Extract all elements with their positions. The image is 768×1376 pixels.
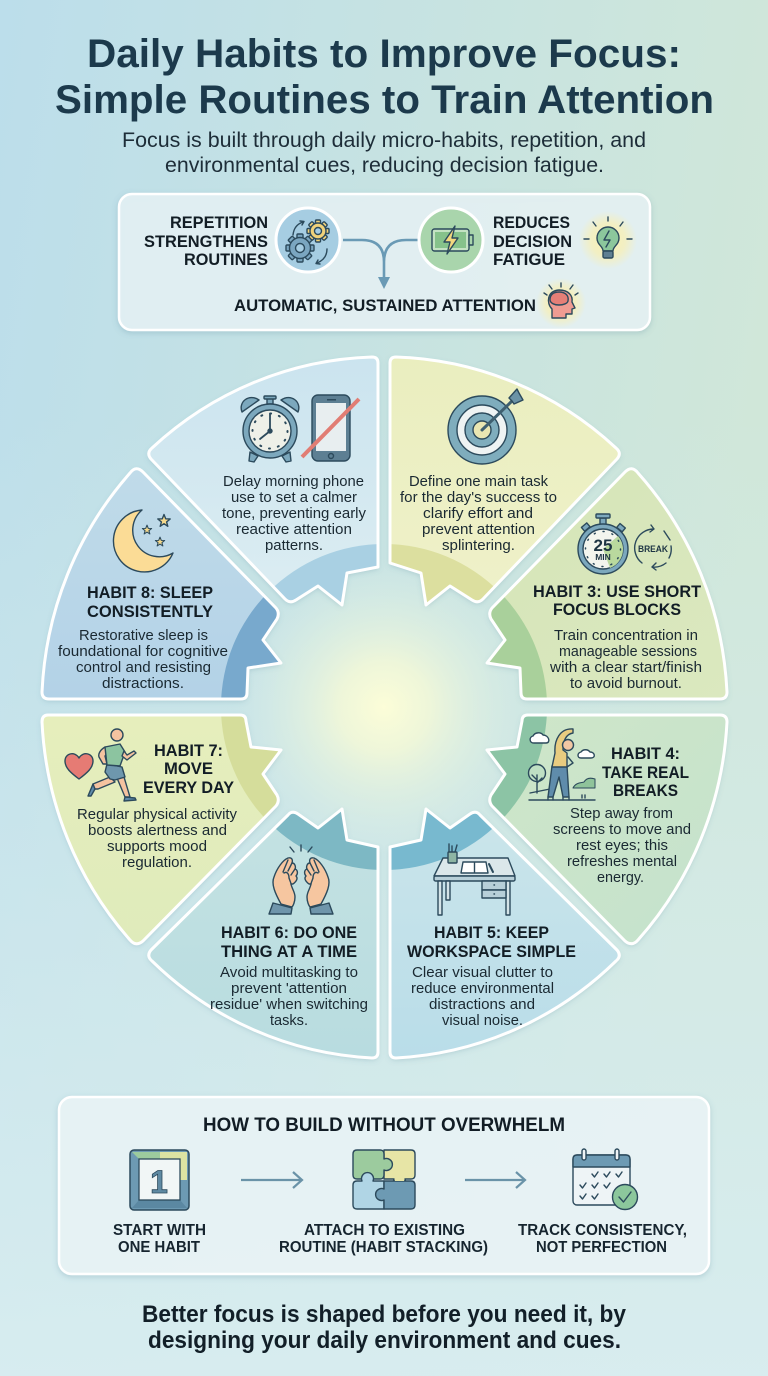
text: habit 6 description: residue' when switching	[210, 997, 368, 1013]
icon: break cycle	[635, 525, 671, 570]
panel: habit 3 focus blocks	[486, 467, 729, 703]
heading: habit 3: FOCUS BLOCKS	[553, 601, 681, 619]
text: habit 6 description: prevent 'attention	[231, 981, 347, 997]
title: Daily Habits to Improve Focus:	[87, 32, 681, 76]
icon: hands	[269, 845, 333, 914]
text: habit 4 description: Step away from	[570, 806, 673, 822]
icon: heart	[65, 754, 93, 779]
heading: habit 5: WORKSPACE SIMPLE	[407, 943, 576, 961]
icon: gears	[276, 208, 340, 272]
label: attach to existing routine: ROUTINE (HABIT STACKING)	[279, 1239, 488, 1256]
closing statement: designing your daily environment and cues.	[148, 1327, 621, 1354]
icon: stopwatch 25 minutes	[578, 514, 628, 574]
text: habit 2 description: Define one main task	[409, 474, 549, 490]
text: habit 1 description: reactive attention	[236, 522, 352, 538]
heading: habit 7: MOVE	[164, 760, 213, 778]
text: habit 2 description: clarify effort and	[423, 506, 533, 522]
heading: habit 7: HABIT 7:	[154, 742, 223, 760]
icon: alarm clock	[241, 396, 299, 462]
heading: habit 8: HABIT 8: SLEEP	[87, 584, 213, 602]
label: track consistency: TRACK CONSISTENCY,	[518, 1222, 687, 1239]
label: attach to existing routine: ATTACH TO EXISTING	[304, 1222, 465, 1239]
label: reduces decision fatigue: REDUCES	[493, 214, 570, 232]
text: habit 5 description: Clear visual clutter to	[412, 965, 553, 981]
panel: how to build without overwhelm	[59, 1097, 709, 1274]
text: habit 3 description	[549, 628, 702, 692]
icon: puzzle	[353, 1150, 415, 1209]
label: start with one habit	[113, 1222, 206, 1256]
icon: stopwatch 25 minutes: 25	[594, 536, 612, 555]
heading: habit 4	[602, 745, 689, 800]
title	[55, 32, 714, 122]
text: habit 4 description: energy.	[597, 870, 644, 886]
heading: habit 4: TAKE REAL	[602, 764, 689, 782]
icon: target with arrow	[448, 389, 523, 464]
subtitle: environmental cues, reducing decision fatigue.	[165, 154, 604, 177]
panel: how habits work	[119, 194, 650, 330]
panel: habit 7 move	[40, 714, 282, 948]
text: habit 7 description	[77, 807, 238, 871]
heading: habit 5	[407, 924, 576, 961]
icon: number one block: 1	[150, 1164, 168, 1200]
heading: habit 8	[87, 584, 213, 621]
heading: habit 7	[143, 742, 234, 797]
icon: break cycle: BREAK	[638, 544, 668, 554]
label: repetition strengthens routines: ROUTINES	[184, 251, 268, 269]
label: start with one habit: START WITH	[113, 1222, 206, 1239]
label: reduces decision fatigue	[493, 214, 572, 269]
text: habit 7 description: Regular physical activity	[77, 807, 238, 823]
label: repetition strengthens routines: REPETITION	[170, 214, 268, 232]
label: repetition strengthens routines	[144, 214, 268, 269]
title: Simple Routines to Train Attention	[55, 78, 714, 122]
closing statement	[142, 1301, 626, 1354]
label: track consistency: NOT PERFECTION	[536, 1239, 667, 1256]
heading: habit 7: EVERY DAY	[143, 779, 234, 797]
text: habit 6 description	[210, 965, 368, 1029]
panel: habit 1 phone delay	[147, 356, 380, 606]
heading: how to build: HOW TO BUILD WITHOUT OVERWHELM	[203, 1114, 565, 1136]
icon: stopwatch 25 minutes: MIN	[595, 552, 611, 562]
text: habit 4 description	[553, 806, 691, 886]
heading: habit 8: CONSISTENTLY	[87, 603, 213, 621]
heading: habit 6: HABIT 6: DO ONE	[221, 924, 357, 942]
heading: habit 3: HABIT 3: USE SHORT	[533, 583, 701, 601]
heading: habit 4: BREAKS	[613, 782, 678, 800]
icon: battery	[419, 208, 483, 272]
text: habit 2 description	[400, 474, 557, 554]
icon: person stretching outdoors	[528, 729, 595, 800]
text: habit 8 description: control and resisting	[76, 660, 211, 676]
text: habit 5 description: reduce environmental	[411, 981, 554, 997]
text: habit 2 description: prevent attention	[422, 522, 535, 538]
icon: moon and stars	[113, 510, 173, 572]
text: habit 1 description: patterns.	[265, 538, 323, 554]
text: habit 8 description: foundational for cognitive	[58, 644, 228, 660]
text: habit 6 description: tasks.	[270, 1013, 308, 1029]
icon: checklist calendar	[573, 1149, 638, 1210]
text: habit 3 description: to avoid burnout.	[570, 676, 682, 692]
icon: brain head	[536, 278, 586, 328]
heading: habit 3	[533, 583, 701, 619]
subtitle	[122, 129, 646, 177]
text: habit 3 description: Train concentration in	[554, 628, 698, 644]
heading: habit 5: HABIT 5: KEEP	[434, 924, 549, 942]
label: attach to existing routine	[279, 1222, 488, 1256]
icon: phone crossed out	[302, 395, 359, 461]
subtitle: Focus is built through daily micro-habits, repetition, and	[122, 129, 646, 152]
panel: habit 5 workspace	[388, 808, 621, 1062]
heading: habit 6	[221, 924, 357, 961]
text: habit 7 description: regulation.	[122, 855, 192, 871]
text: habit 8 description	[58, 628, 228, 692]
icon: light bulb	[579, 211, 637, 269]
text: habit 1 description: tone, preventing early	[222, 506, 367, 522]
arrow: step 1 to 2	[241, 1172, 302, 1188]
text: habit 5 description: distractions and	[429, 997, 535, 1013]
text: habit 6 description: Avoid multitasking to	[220, 965, 358, 981]
icon: runner	[88, 729, 136, 801]
label: reduces decision fatigue: DECISION	[493, 233, 572, 251]
panel: habit 6 one thing	[147, 808, 380, 1062]
icon: number one block	[130, 1150, 189, 1210]
text: habit 8 description: Restorative sleep is	[79, 628, 208, 644]
text: habit 3 description: manageable sessions	[559, 644, 697, 660]
text: habit 3 description: with a clear start/finish	[549, 660, 702, 676]
text: habit 7 description: supports mood	[107, 839, 207, 855]
panel: habit 2 main task	[388, 356, 621, 606]
panel: habit 4 real breaks	[486, 714, 729, 948]
text: habit 8 description: distractions.	[102, 676, 184, 692]
text: habit 2 description: for the day's success to	[400, 490, 557, 506]
closing statement: Better focus is shaped before you need it, by	[142, 1301, 626, 1328]
text: habit 1 description	[222, 474, 367, 554]
label: reduces decision fatigue: FATIGUE	[493, 251, 565, 269]
text: habit 4 description: screens to move and	[553, 822, 691, 838]
text: habit 1 description: use to set a calmer	[231, 490, 357, 506]
text: habit 4 description: refreshes mental	[567, 854, 677, 870]
text: habit 5 description	[411, 965, 554, 1029]
text: habit 4 description: rest eyes; this	[576, 838, 668, 854]
icon: desk	[434, 844, 515, 915]
heading: habit 4: HABIT 4:	[611, 745, 680, 763]
label: automatic sustained attention: AUTOMATIC, SUSTAINED ATTENTION	[234, 297, 536, 315]
arrow: step 2 to 3	[465, 1172, 525, 1188]
label: repetition strengthens routines: STRENGTHENS	[144, 233, 268, 251]
connector arrow	[343, 240, 419, 289]
label: track consistency	[518, 1222, 687, 1256]
text: habit 2 description: splintering.	[442, 538, 515, 554]
panel: habit 8 sleep	[40, 467, 282, 703]
label: start with one habit: ONE HABIT	[118, 1239, 201, 1256]
text: habit 7 description: boosts alertness and	[88, 823, 227, 839]
text: habit 5 description: visual noise.	[442, 1013, 523, 1029]
heading: habit 6: THING AT A TIME	[221, 943, 357, 961]
text: habit 1 description: Delay morning phone	[223, 474, 364, 490]
